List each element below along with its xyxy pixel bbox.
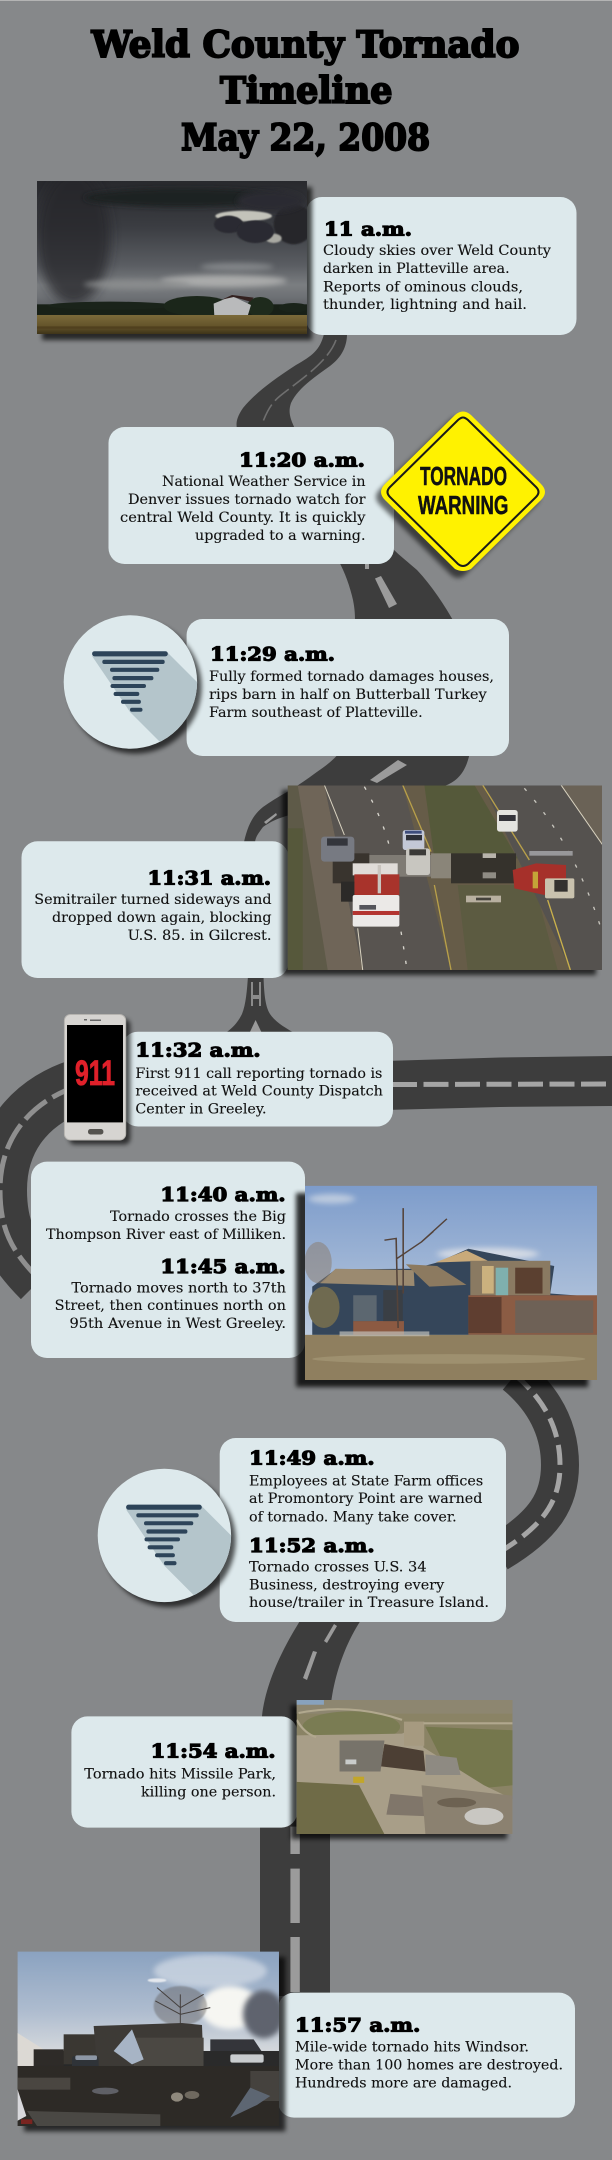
heading: 11:54 a.m.: 11:54 a.m.: [151, 1741, 276, 1763]
photo: storm clouds over barn: [37, 171, 314, 340]
description: 11:49: at Promontory Point are warned: [249, 1491, 482, 1507]
panel: 11 a.m.: [37, 171, 576, 340]
road segment: left curve: [0, 1086, 78, 1280]
description: 11:52: Business, destroying every: [249, 1577, 444, 1593]
heading: 11:57 a.m.: 11:57 a.m.: [295, 2014, 420, 2036]
description: Farm southeast of Platteville.: [209, 705, 423, 721]
description: central Weld County. It is quickly: [120, 510, 366, 526]
description: 11:40: Tornado crosses the Big: [110, 1209, 286, 1225]
road segment: final straight: [260, 1620, 361, 1996]
description: rips barn in half on Butterball Turkey: [209, 687, 487, 703]
text box: [31, 1162, 305, 1358]
description: Fully formed tornado damages houses,: [209, 669, 494, 685]
description: Center in Greeley.: [135, 1101, 267, 1117]
road segment: 11:20 to 11:29: [338, 548, 454, 622]
icon: tornado in circle: [98, 1468, 240, 1610]
title: [91, 23, 520, 159]
description: National Weather Service in: [162, 474, 366, 490]
text box: [108, 427, 394, 564]
heading: 11:32 a.m.: 11:32 a.m.: [135, 1040, 261, 1062]
heading: 11:31 a.m.: 11:31 a.m.: [148, 867, 271, 889]
heading: 11 a.m.: 11 a.m.: [324, 218, 412, 240]
description: Reports of ominous clouds,: [323, 279, 523, 295]
description: 11:49: of tornado. Many take cover.: [249, 1510, 457, 1526]
description: Cloudy skies over Weld County: [323, 243, 551, 259]
photo: Windsor damage: [17, 1951, 285, 2131]
panel: 11:49 and 11:52 a.m.: [98, 1438, 506, 1622]
heading: 11:45 a.m.: 11:45 a.m.: [160, 1256, 286, 1278]
panel: 11:29 a.m.: [64, 615, 509, 756]
description: 11:52: Tornado crosses U.S. 34: [249, 1559, 427, 1575]
heading: 11:40 a.m.: 11:40 a.m.: [160, 1184, 286, 1206]
description: received at Weld County Dispatch: [135, 1084, 383, 1100]
road segment: 11:31 to 11:32: [224, 976, 296, 1034]
winding road: [0, 334, 612, 1996]
icon: tornado warning sign: TORNADO: [420, 461, 507, 491]
heading: 11:49 a.m.: 11:49 a.m.: [249, 1448, 375, 1470]
icon: tornado warning sign: WARNING: [418, 490, 508, 520]
description: dropped down again, blocking: [52, 910, 272, 926]
title: Weld County Tornado: [91, 23, 520, 66]
description: Tornado hits Missile Park,: [84, 1766, 276, 1782]
title: May 22, 2008: [181, 116, 430, 159]
icon: phone showing 911: 911: [75, 1054, 115, 1093]
heading: 11:29 a.m.: 11:29 a.m.: [210, 644, 335, 666]
description: [84, 1766, 276, 1800]
text box: [187, 619, 509, 756]
description: 11:45: Tornado moves north to 37th: [71, 1280, 286, 1296]
description: 11:49: Employees at State Farm offices: [249, 1473, 483, 1489]
description: thunder, lightning and hail.: [323, 297, 527, 313]
icon: phone showing 911: [64, 1014, 130, 1144]
text box: [22, 841, 288, 978]
description: 11:40: Thompson River east of Milliken.: [46, 1227, 286, 1243]
heading: 11:20 a.m.: 11:20 a.m.: [239, 450, 365, 472]
description: U.S. 85. in Gilcrest.: [128, 928, 271, 944]
description: 11:45: 95th Avenue in West Greeley.: [70, 1316, 286, 1332]
description: [34, 892, 272, 944]
description: 11:45: [55, 1280, 286, 1332]
panel: 11:40 and 11:45 a.m.: [31, 1162, 597, 1387]
description: [120, 474, 366, 544]
description: 11:45: Street, then continues north on: [55, 1298, 286, 1314]
icon: tornado in circle: [64, 615, 206, 756]
text box: [306, 197, 576, 335]
description: Mile-wide tornado hits Windsor.: [295, 2040, 529, 2056]
panel: 11:32 a.m.: [64, 1014, 393, 1144]
title: Timeline: [220, 69, 392, 112]
panel: 11:57 a.m.: [17, 1951, 575, 2131]
description: [323, 243, 551, 313]
description: 11:52: house/trailer in Treasure Island.: [249, 1595, 489, 1611]
description: darken in Platteville area.: [323, 261, 510, 277]
description: 11:52: [249, 1559, 489, 1611]
description: Denver issues tornado watch for: [128, 492, 366, 508]
photo: aerial view of Missile Park debris: [291, 1700, 512, 1839]
description: More than 100 homes are destroyed.: [295, 2057, 563, 2073]
road segment: right curve: [498, 1375, 560, 1553]
text box: [71, 1716, 297, 1828]
road segment: 11 a.m. to 11:20: [237, 334, 347, 429]
icon: tornado warning sign: [376, 412, 545, 578]
panel: 11:54 a.m.: [71, 1700, 512, 1839]
road segment: horizontal toward right edge: [385, 1056, 612, 1110]
description: [295, 2040, 563, 2091]
description: First 911 call reporting tornado is: [135, 1066, 382, 1082]
road segment: 11:29 to 11:31: [244, 752, 470, 842]
panel: 11:31 a.m.: [22, 785, 603, 978]
description: killing one person.: [141, 1784, 276, 1800]
heading: 11:52 a.m.: 11:52 a.m.: [249, 1535, 375, 1557]
top edge strip: [0, 0, 612, 1]
photo: damaged house: [296, 1186, 597, 1387]
description: 11:40: [46, 1209, 286, 1243]
description: 11:49: [249, 1473, 483, 1526]
text box: [278, 1993, 575, 2118]
text box: [220, 1438, 506, 1622]
description: [209, 669, 494, 721]
description: [135, 1066, 383, 1117]
panel: 11:20 a.m.: [108, 412, 545, 578]
description: Hundreds more are damaged.: [295, 2075, 512, 2091]
description: Semitrailer turned sideways and: [34, 892, 272, 908]
text box: [122, 1032, 393, 1126]
photo: overturned semitrailer on highway: [282, 785, 603, 975]
description: upgraded to a warning.: [195, 528, 366, 544]
